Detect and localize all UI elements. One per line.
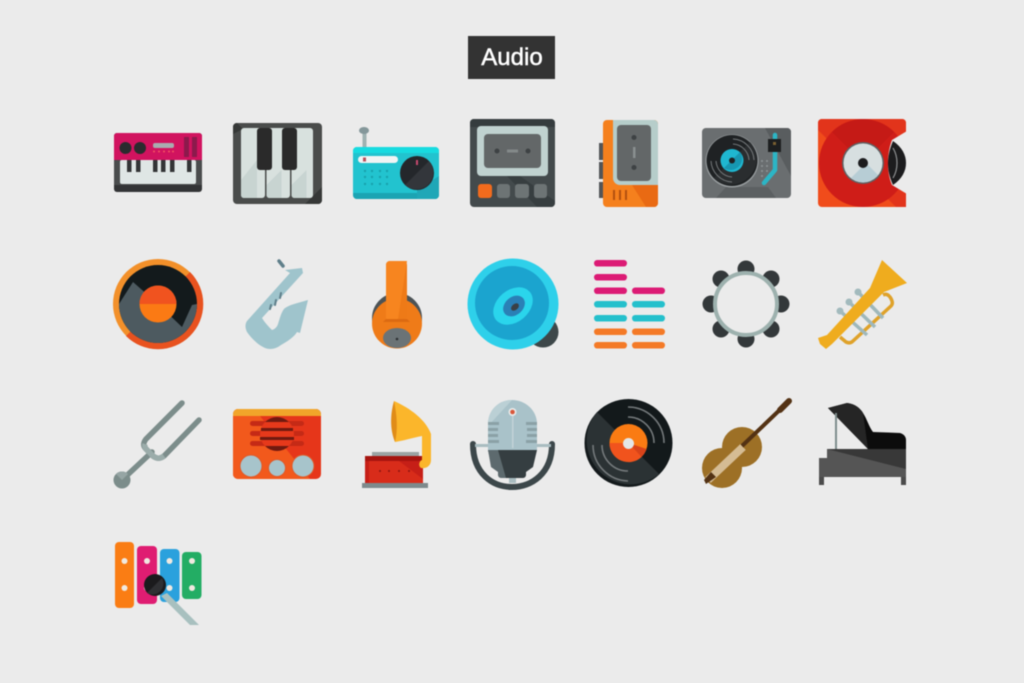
icon: xylophone — [115, 542, 202, 625]
icon: cassette player — [470, 119, 555, 207]
icon: retro red radio — [233, 409, 321, 479]
icon: headphones — [372, 261, 422, 348]
icon: equalizer bars — [594, 260, 665, 348]
icon: walkman — [599, 120, 658, 207]
icon: gramophone — [362, 401, 431, 488]
icon: synthesizer keyboard — [114, 133, 202, 192]
icon: blue speaker cone — [468, 258, 558, 350]
icon: orange speaker disc — [113, 259, 203, 349]
icon: red record sleeve — [818, 119, 907, 207]
icon: vinyl record — [584, 399, 672, 487]
icon: piano keys — [233, 123, 322, 204]
icon: saxophone — [246, 261, 308, 349]
title: Audio: Audio — [481, 44, 543, 71]
title: Audio — [468, 36, 555, 79]
icon: tuning fork — [114, 403, 199, 488]
icon: tambourine — [702, 260, 790, 348]
icon: cello — [702, 401, 789, 488]
icon: microphone — [473, 400, 552, 487]
icon: teal radio — [353, 127, 439, 199]
icon: grand piano — [819, 403, 906, 485]
icon: turntable — [702, 128, 791, 198]
icon: trumpet — [818, 260, 907, 349]
